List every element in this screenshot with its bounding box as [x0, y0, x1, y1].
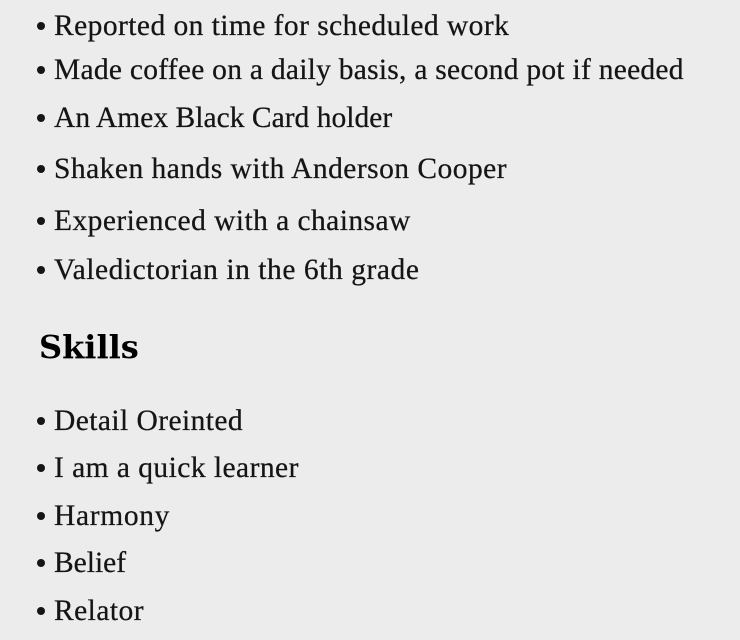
bullet: made coffee: Made coffee on a daily basis, a second pot if needed — [54, 54, 684, 86]
bullet: Anderson Cooper: Shaken hands with Anderson Cooper — [54, 153, 507, 185]
bullet: reported on time: Reported on time for scheduled work — [54, 10, 509, 42]
list: skills bullets — [37, 405, 299, 627]
bullet: valedictorian: Valedictorian in the 6th grade — [54, 254, 419, 286]
bullet: quick learner: I am a quick learner — [54, 452, 299, 484]
bullet: Amex card: An Amex Black Card holder — [54, 102, 392, 134]
bullet: detail oriented: Detail Oreinted — [54, 405, 243, 437]
bullet: harmony: Harmony — [54, 500, 170, 532]
bullet: relator: Relator — [54, 595, 144, 627]
bullet: belief: Belief — [54, 547, 126, 579]
bullet: chainsaw: Experienced with a chainsaw — [54, 205, 411, 237]
heading: Skills: Skills — [39, 328, 139, 366]
list: experience bullets — [37, 10, 684, 286]
